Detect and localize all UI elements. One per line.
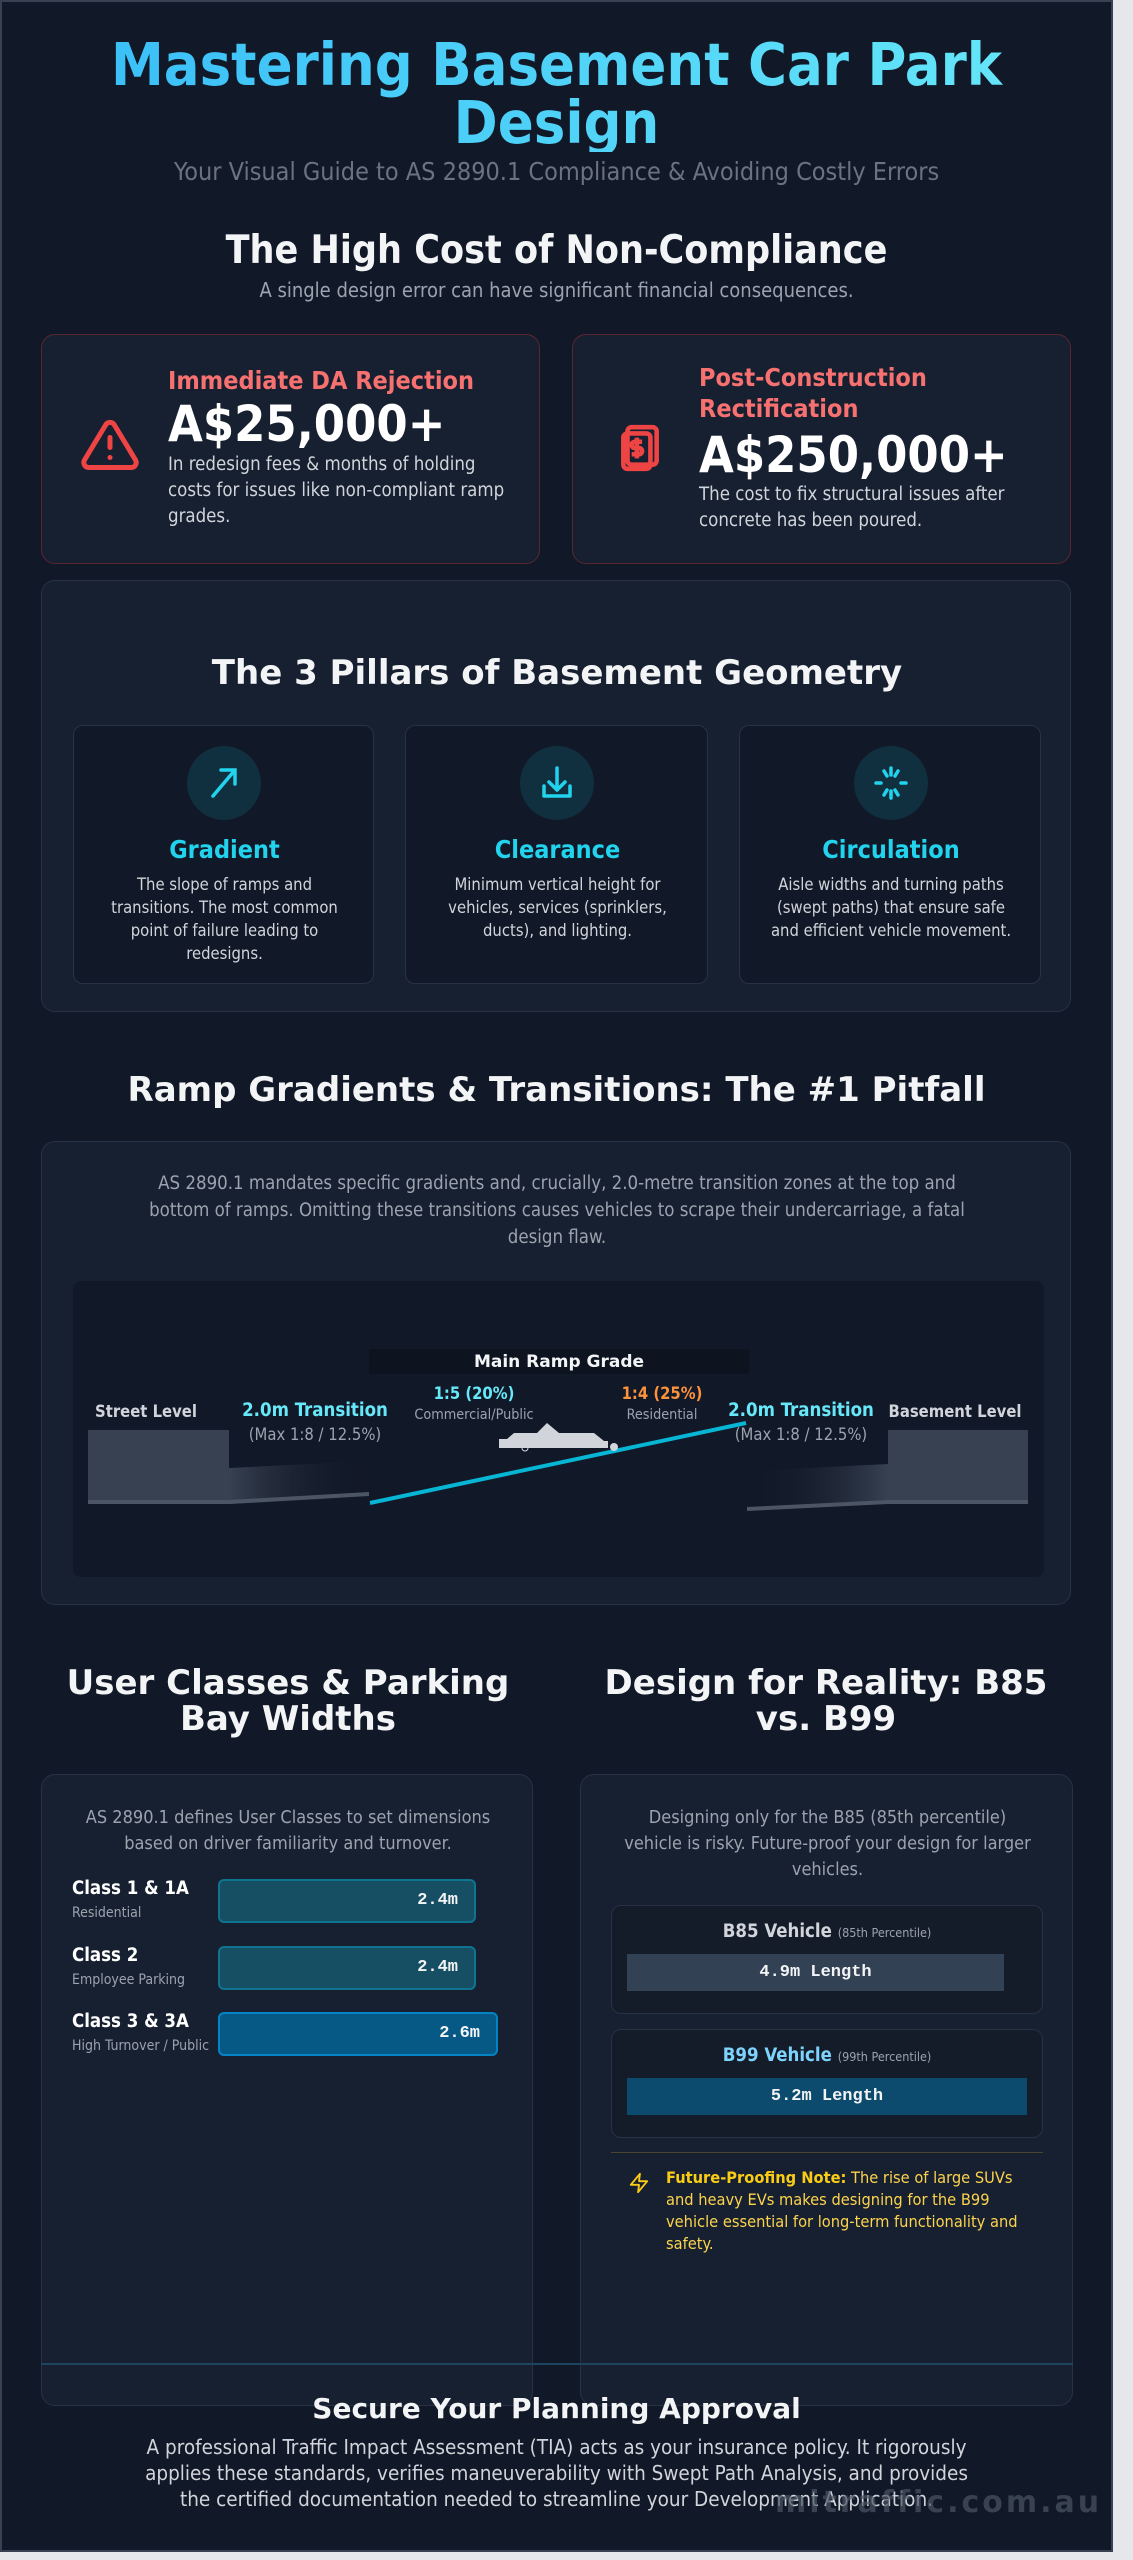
labels: (Max 1:8 / 12.5%) (249, 1425, 381, 1444)
icon: lightning (630, 2172, 648, 2194)
basement level block (747, 1430, 1028, 1509)
labels: 1:4 (25%) (622, 1384, 702, 1403)
main ramp box (369, 1349, 749, 1374)
description: AS 2890.1 mandates specific gradients and, crucially, 2.0-metre transition zones at the top and (158, 1173, 956, 1194)
pillar: circulation (739, 725, 1041, 984)
street level block (88, 1430, 369, 1504)
icon: arrow (187, 746, 261, 820)
B85 bar: 4.9m Length (759, 1963, 872, 1982)
desc: transitions. The most common (111, 898, 338, 917)
labels (95, 1384, 1021, 1444)
ramp line (370, 1423, 746, 1503)
desc: and efficient vehicle movement. (771, 921, 1011, 940)
CTA paragraph: the certified documentation needed to streamline your Development Application. (180, 2487, 933, 2511)
title: Mastering Basement Car Park (111, 30, 1002, 99)
future-proofing note (630, 2168, 1018, 2253)
card title: Post-Construction (699, 363, 927, 392)
B99 bar (627, 2078, 1027, 2115)
class 2 row: Employee Parking (72, 1972, 185, 1988)
labels: 2.0m Transition (242, 1400, 388, 1421)
pillar: clearance (405, 725, 708, 984)
heading: B85 vs B99: vs. B99 (756, 1699, 896, 1739)
class 1 row (72, 1878, 476, 1923)
amount: A$250,000+ (699, 426, 1008, 484)
class 2 row: Class 2 (72, 1945, 138, 1966)
class 2 row (72, 1945, 476, 1990)
description (698, 484, 1004, 531)
watermark: mitraffic.com.au (775, 2485, 1102, 2520)
title: Circulation (822, 835, 960, 864)
description: In redesign fees & months of holding (168, 454, 475, 475)
desc: Minimum vertical height for (454, 875, 660, 894)
class 2 row: 2.4m (417, 1958, 458, 1977)
B99 box: B99 Vehicle (99th Percentile) (723, 2045, 931, 2066)
description: vehicle is risky. Future-proof your design for larger (624, 1833, 1031, 1854)
description: Designing only for the B85 (85th percentile) (649, 1807, 1006, 1828)
class 1 row: Class 1 & 1A (72, 1878, 189, 1899)
B85 box (611, 1905, 1043, 2014)
desc: Aisle widths and turning paths (778, 875, 1004, 894)
panel: three pillars (41, 580, 1071, 1012)
heading: user classes (67, 1663, 509, 1739)
B99 box (611, 2029, 1043, 2138)
card title (699, 363, 927, 423)
title: Gradient (169, 835, 280, 864)
future-proofing note: safety. (666, 2234, 714, 2253)
desc: redesigns. (186, 944, 263, 963)
pillar: gradient (73, 725, 374, 984)
amount: A$25,000+ (168, 395, 445, 453)
class 1 row: Residential (72, 1905, 141, 1921)
future-proofing note: Future-Proofing Note: The rise of large SUVs (666, 2168, 1013, 2187)
heading: high cost: The High Cost of Non-Compliance (226, 228, 887, 273)
description (149, 1173, 965, 1248)
labels: Street Level (95, 1402, 197, 1421)
labels: Commercial/Public (414, 1407, 534, 1423)
desc: vehicles, services (sprinklers, (448, 898, 667, 917)
labels: (Max 1:8 / 12.5%) (735, 1425, 867, 1444)
description: design flaw. (508, 1227, 606, 1248)
card: rectification (572, 334, 1071, 564)
desc: (swept paths) that ensure safe (777, 898, 1005, 917)
subtitle: Your Visual Guide to AS 2890.1 Compliance & Avoiding Costly Errors (174, 157, 939, 186)
title (40, 36, 1073, 152)
description: The cost to fix structural issues after (699, 484, 1004, 505)
car (499, 1423, 618, 1451)
heading: ramp gradients: Ramp Gradients & Transitions: The #1 Pitfall (128, 1070, 985, 1110)
description: concrete has been poured. (699, 510, 922, 531)
icon: download (520, 746, 594, 820)
panel: B85 vs B99 (580, 1774, 1073, 2406)
CTA paragraph: A professional Traffic Impact Assessment (TIA) acts as your insurance policy. It rigorously (147, 2435, 966, 2459)
icon: money (621, 424, 659, 472)
desc: The slope of ramps and (137, 875, 312, 894)
desc (448, 875, 667, 940)
labels: 1:5 (20%) (434, 1384, 514, 1403)
icon: warning triangle (81, 420, 139, 470)
B85 box: B85 Vehicle (85th Percentile) (723, 1921, 931, 1942)
future-proofing note: and heavy EVs makes designing for the B99 (666, 2190, 990, 2209)
panel: ramp (41, 1141, 1071, 1605)
card: DA rejection (41, 334, 540, 564)
CTA paragraph (145, 2435, 968, 2511)
CTA paragraph: applies these standards, verifies maneuverability with Swept Path Analysis, and provides (145, 2461, 968, 2485)
class 3 row: 2.6m (439, 2024, 480, 2043)
class 1 row: 2.4m (417, 1891, 458, 1910)
ramp diagram (73, 1281, 1044, 1577)
desc (771, 875, 1011, 940)
card title: Immediate DA Rejection (168, 366, 474, 395)
card title: Rectification (699, 394, 858, 423)
description (624, 1807, 1031, 1880)
title: Clearance (495, 835, 620, 864)
future-proofing note: vehicle essential for long-term functionality and (666, 2212, 1018, 2231)
description (168, 454, 504, 527)
CTA heading: Secure Your Planning Approval (312, 2392, 801, 2425)
title: Design (454, 88, 659, 157)
description: based on driver familiarity and turnover. (124, 1833, 452, 1854)
heading: user classes: User Classes & Parking (67, 1663, 509, 1703)
panel: user classes (41, 1774, 533, 2406)
labels: Basement Level (889, 1402, 1021, 1421)
heading: B85 vs B99: Design for Reality: B85 (605, 1663, 1047, 1703)
description: vehicles. (792, 1859, 863, 1880)
heading: B85 vs B99 (605, 1663, 1047, 1739)
description: grades. (168, 506, 230, 527)
icon: loader (854, 746, 928, 820)
desc (111, 875, 338, 963)
B85 bar (627, 1954, 1004, 1991)
labels: 2.0m Transition (728, 1400, 874, 1421)
main ramp box: Main Ramp Grade (474, 1352, 644, 1372)
desc: point of failure leading to (131, 921, 318, 940)
class 3 row (72, 2011, 498, 2056)
labels: Residential (627, 1407, 697, 1423)
subheading: high cost: A single design error can have significant financial consequences. (259, 278, 854, 302)
class 3 row: Class 3 & 3A (72, 2011, 189, 2032)
description: costs for issues like non-compliant ramp (168, 480, 504, 501)
heading: The 3 Pillars of Basement Geometry (212, 653, 902, 693)
description: AS 2890.1 defines User Classes to set dimensions (86, 1807, 490, 1828)
B99 bar: 5.2m Length (771, 2087, 883, 2106)
description: bottom of ramps. Omitting these transitions causes vehicles to scrape their undercarriage, a fatal (149, 1200, 965, 1221)
description (86, 1807, 490, 1854)
class 3 row: High Turnover / Public (72, 2038, 209, 2054)
heading: user classes: Bay Widths (180, 1699, 396, 1739)
desc: ducts), and lighting. (483, 921, 632, 940)
